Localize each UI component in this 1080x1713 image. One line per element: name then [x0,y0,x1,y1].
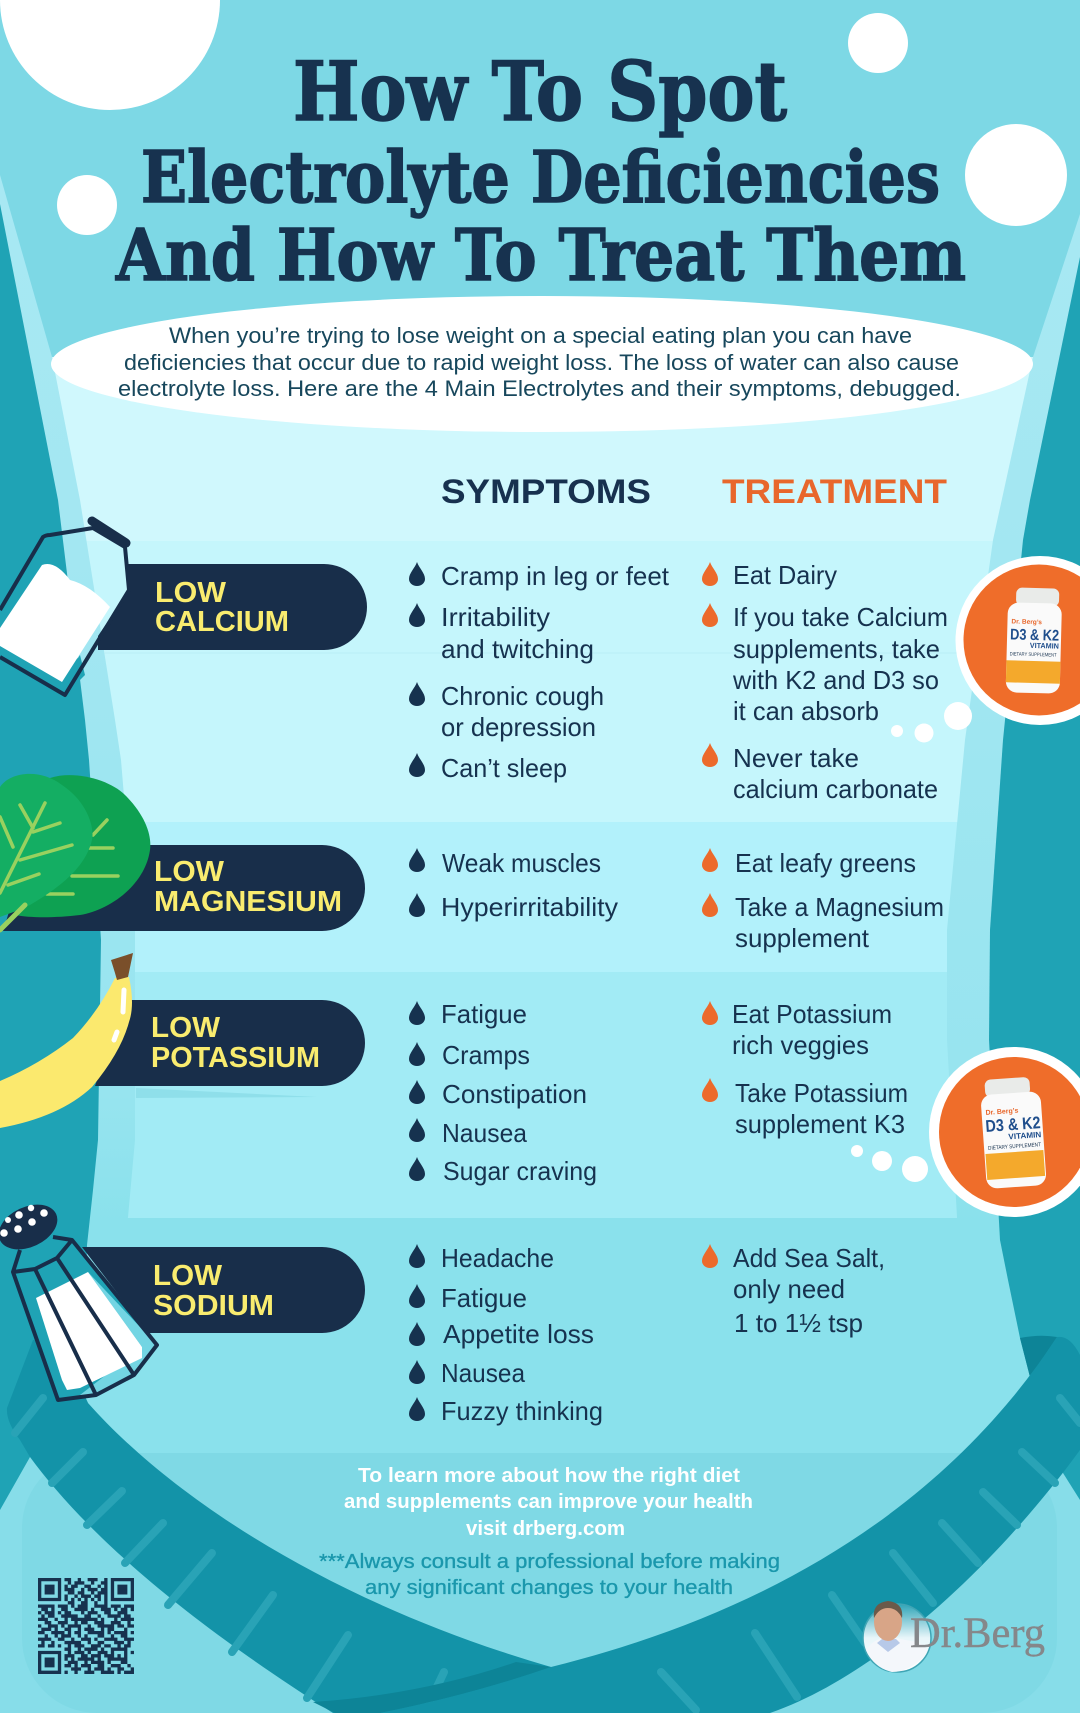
water rows [52,357,1033,1218]
symptoms list: or depression [441,712,596,742]
treatment list: Eat Dairy [733,560,837,590]
panel: low potassium [0,953,1080,1217]
treatment list: rich veggies [732,1030,869,1060]
footer: disclaimer text [319,1550,780,1599]
symptoms list: and twitching [441,634,594,664]
label pill: MAGNESIUM [154,886,342,918]
treatment list: Eat leafy greens [735,848,916,878]
label pill: CALCIUM [155,606,289,638]
treatment list: Take Potassium [735,1078,908,1108]
bottom panel [0,1453,1080,1713]
wordmark: Dr.Berg [910,1610,1045,1657]
footer: learn more text: To learn more about how the right diet [358,1464,740,1487]
left tape ticks [15,1398,444,1708]
treatment list [702,1243,885,1338]
QR code [38,1580,134,1672]
logo: Dr. Berg [863,1601,1045,1672]
callout: vitamin bottle: VITAMIN [1008,1130,1042,1141]
panel: low calcium [0,521,1080,804]
symptoms list: Fatigue [441,1283,527,1313]
icon: milk bottle [0,521,129,695]
icon: leafy greens [0,774,150,930]
panel: low sodium [0,1196,885,1426]
icon: salt shaker [0,1196,157,1400]
symptoms list [409,999,597,1186]
intro text: When you’re trying to lose weight on a special eating plan you can have [169,323,912,348]
right tape ticks [661,1398,1080,1710]
tape shadow sliver [313,1662,551,1713]
icon: banana [0,953,133,1128]
symptoms list: Constipation [442,1079,587,1109]
portrait [863,1601,931,1672]
treatment list: Add Sea Salt, [733,1243,885,1273]
symptoms list: Cramp in leg or feet [441,561,670,591]
bubbles [0,0,1067,235]
symptoms list: Cramps [442,1040,530,1070]
footer: learn more text [344,1464,753,1540]
symptoms list: Can’t sleep [441,753,567,783]
callout: vitamin bottle: D3 & K2 [1010,626,1059,645]
treatment list: supplement K3 [735,1109,905,1139]
treatment list: supplements, take [733,634,940,664]
label pill: POTASSIUM [151,1042,320,1074]
footer: disclaimer text: any significant changes to your health [365,1576,733,1599]
label pill: LOW [153,1260,223,1292]
symptoms list: Irritability [441,602,550,632]
left tape band [7,1340,700,1713]
symptoms list [409,561,670,783]
treatment list: with K2 and D3 so [732,665,939,695]
treatment list: only need [733,1274,845,1304]
intro text: deficiencies that occur due to rapid weight loss. The loss of water can also cause [124,350,959,375]
symptoms list: Nausea [442,1118,528,1148]
label pill [82,1247,365,1333]
symptoms list: Sugar craving [443,1156,597,1186]
callout: vitamin bottle: Dr. Berg’s [985,1108,1019,1117]
treatment list: Never take [733,743,859,773]
right tape band [380,1337,1080,1713]
symptoms list: Chronic cough [441,681,604,711]
callout: vitamin bottle: VITAMIN [1030,641,1059,651]
treatment list: Take a Magnesium [735,892,944,922]
treatment list: it can absorb [733,696,879,726]
dark left side [0,204,101,1510]
symptoms list: Appetite loss [443,1319,594,1349]
callout: vitamin bottle: DIETARY SUPPLEMENT [988,1142,1042,1152]
label pill: LOW [151,1012,221,1044]
callout: vitamin bottle [891,556,1080,742]
title: And How To Treat Them [115,213,966,297]
callout: vitamin bottle: DIETARY SUPPLEMENT [1010,651,1057,659]
treatment list: Eat Potassium [732,999,892,1029]
symptoms list: Headache [441,1243,554,1273]
symptoms list: Nausea [441,1358,525,1388]
label pill: LOW [155,577,227,609]
symptoms list [409,848,618,922]
symptoms list [409,1243,603,1426]
callout: vitamin bottle [851,1047,1080,1217]
title: Electrolyte Deficiencies [141,135,940,219]
column heading: treatment: TREATMENT [722,473,947,511]
intro text: electrolyte loss. Here are the 4 Main Electrolytes and their symptoms, debugged. [118,376,961,401]
column heading: symptoms: SYMPTOMS [441,473,651,511]
footer: learn more text: and supplements can improve your health [344,1490,753,1513]
measuring tape [7,1336,1080,1713]
symptoms list: Hyperirritability [441,892,618,922]
treatment list [702,848,944,953]
symptoms list: Weak muscles [442,848,601,878]
label pill: SODIUM [153,1290,274,1322]
treatment list: calcium carbonate [733,774,938,804]
title: How To Spot [293,45,788,140]
glass rim band [0,175,1080,1453]
label pill: LOW [154,856,225,888]
intro ellipse [51,296,1033,432]
label pill [95,1000,365,1086]
title [115,45,966,297]
panel: low magnesium [0,774,944,953]
symptoms list: Fuzzy thinking [441,1396,603,1426]
footer: disclaimer text: ***Always consult a professional before making [319,1550,780,1573]
intro text [118,323,961,401]
treatment list: If you take Calcium [733,602,948,632]
treatment list: supplement [735,923,870,953]
symptoms list: Fatigue [441,999,527,1029]
footer: learn more text: visit drberg.com [466,1517,625,1540]
treatment list [702,560,948,804]
treatment list: 1 to 1½ tsp [734,1308,863,1338]
label pill [3,845,365,931]
callout: vitamin bottle: D3 & K2 [985,1113,1041,1136]
label pill [98,564,367,650]
callout: vitamin bottle: Dr. Berg’s [1011,618,1042,626]
treatment list [702,999,908,1139]
dark right side [989,257,1080,1500]
